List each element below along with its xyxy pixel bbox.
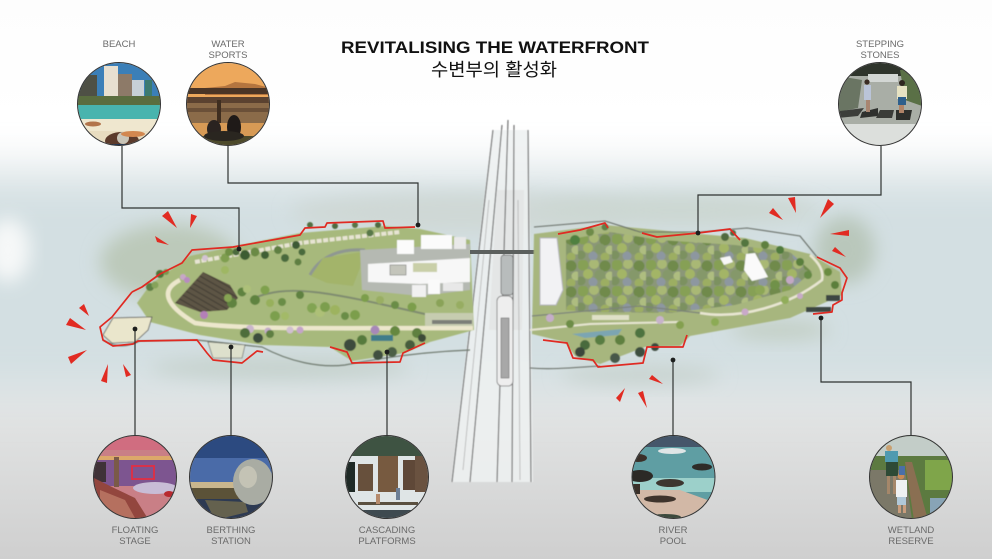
callout: water sports: SPORTS xyxy=(209,50,247,61)
bridge-side buildings xyxy=(540,238,563,305)
callout: berthing station: BERTHING xyxy=(207,525,255,536)
east trees and shrubs xyxy=(546,224,840,363)
title xyxy=(341,38,650,80)
callout: river pool xyxy=(627,436,716,547)
callout: floating stage: STAGE xyxy=(119,536,151,547)
east riverside path xyxy=(700,255,822,315)
callout: river pool: POOL xyxy=(660,536,686,547)
callout: beach xyxy=(77,39,161,150)
red waterfront boundary line: east xyxy=(543,223,847,367)
callout: berthing station: STATION xyxy=(211,536,251,547)
callout: stepping stones: STEPPING xyxy=(856,39,904,50)
amphitheatre xyxy=(175,272,238,312)
east forest xyxy=(566,232,812,313)
photo: berthing station xyxy=(189,436,273,520)
east village buildings xyxy=(720,253,768,281)
civic buildings xyxy=(360,235,473,326)
photo: wetland reserve xyxy=(869,436,953,520)
callout: stepping stones xyxy=(838,39,922,146)
callout: beach: BEACH xyxy=(103,39,136,50)
photo: river pool xyxy=(632,436,714,518)
callout: cascading platforms: PLATFORMS xyxy=(358,536,416,547)
photo: beach xyxy=(77,62,161,150)
central lawn xyxy=(311,252,362,286)
map: east island xyxy=(530,221,842,369)
west island land xyxy=(137,226,474,361)
berthing quay xyxy=(208,342,245,358)
callout: wetland reserve: WETLAND xyxy=(888,525,934,536)
callout: wetland reserve: RESERVE xyxy=(888,536,934,547)
red emphasis ticks: west top xyxy=(155,211,197,245)
east walkway xyxy=(530,221,817,369)
sunken pool strip xyxy=(371,335,393,341)
callout: stepping stones: STONES xyxy=(861,50,899,61)
map: west island xyxy=(103,222,474,366)
bridge deck in perspective xyxy=(451,120,533,482)
callout: river pool: RIVER xyxy=(658,525,688,536)
photo: water sports xyxy=(186,62,270,146)
title: REVITALISING THE WATERFRONT xyxy=(341,38,650,57)
river pool basin xyxy=(572,329,622,338)
promenade path xyxy=(168,280,473,328)
photo: floating stage xyxy=(94,436,178,522)
callout: cascading platforms: CASCADING xyxy=(359,525,415,536)
callout: water sports: WATER xyxy=(211,39,245,50)
west trees xyxy=(146,222,464,360)
red emphasis ticks: west tip xyxy=(66,304,131,383)
photo: cascading platforms xyxy=(345,436,429,520)
red emphasis ticks: river pool xyxy=(616,375,663,408)
red waterfront boundary line: west xyxy=(100,221,425,363)
photo: stepping stones xyxy=(838,62,922,146)
callout: water sports xyxy=(186,39,270,146)
leader lines with anchor dots xyxy=(122,146,911,436)
callout: cascading platforms xyxy=(345,436,429,547)
red emphasis ticks: east tip xyxy=(769,197,849,257)
callout: wetland reserve xyxy=(869,436,953,547)
callout: berthing station xyxy=(189,436,273,547)
east island land xyxy=(532,225,842,364)
river water wash xyxy=(0,175,992,390)
callout: floating stage xyxy=(94,436,178,547)
skywalk across the bridge xyxy=(470,250,558,254)
callout: floating stage: FLOATING xyxy=(112,525,158,536)
west walkway and breakwater xyxy=(103,340,470,366)
title: 수변부의 활성화 xyxy=(431,60,557,80)
